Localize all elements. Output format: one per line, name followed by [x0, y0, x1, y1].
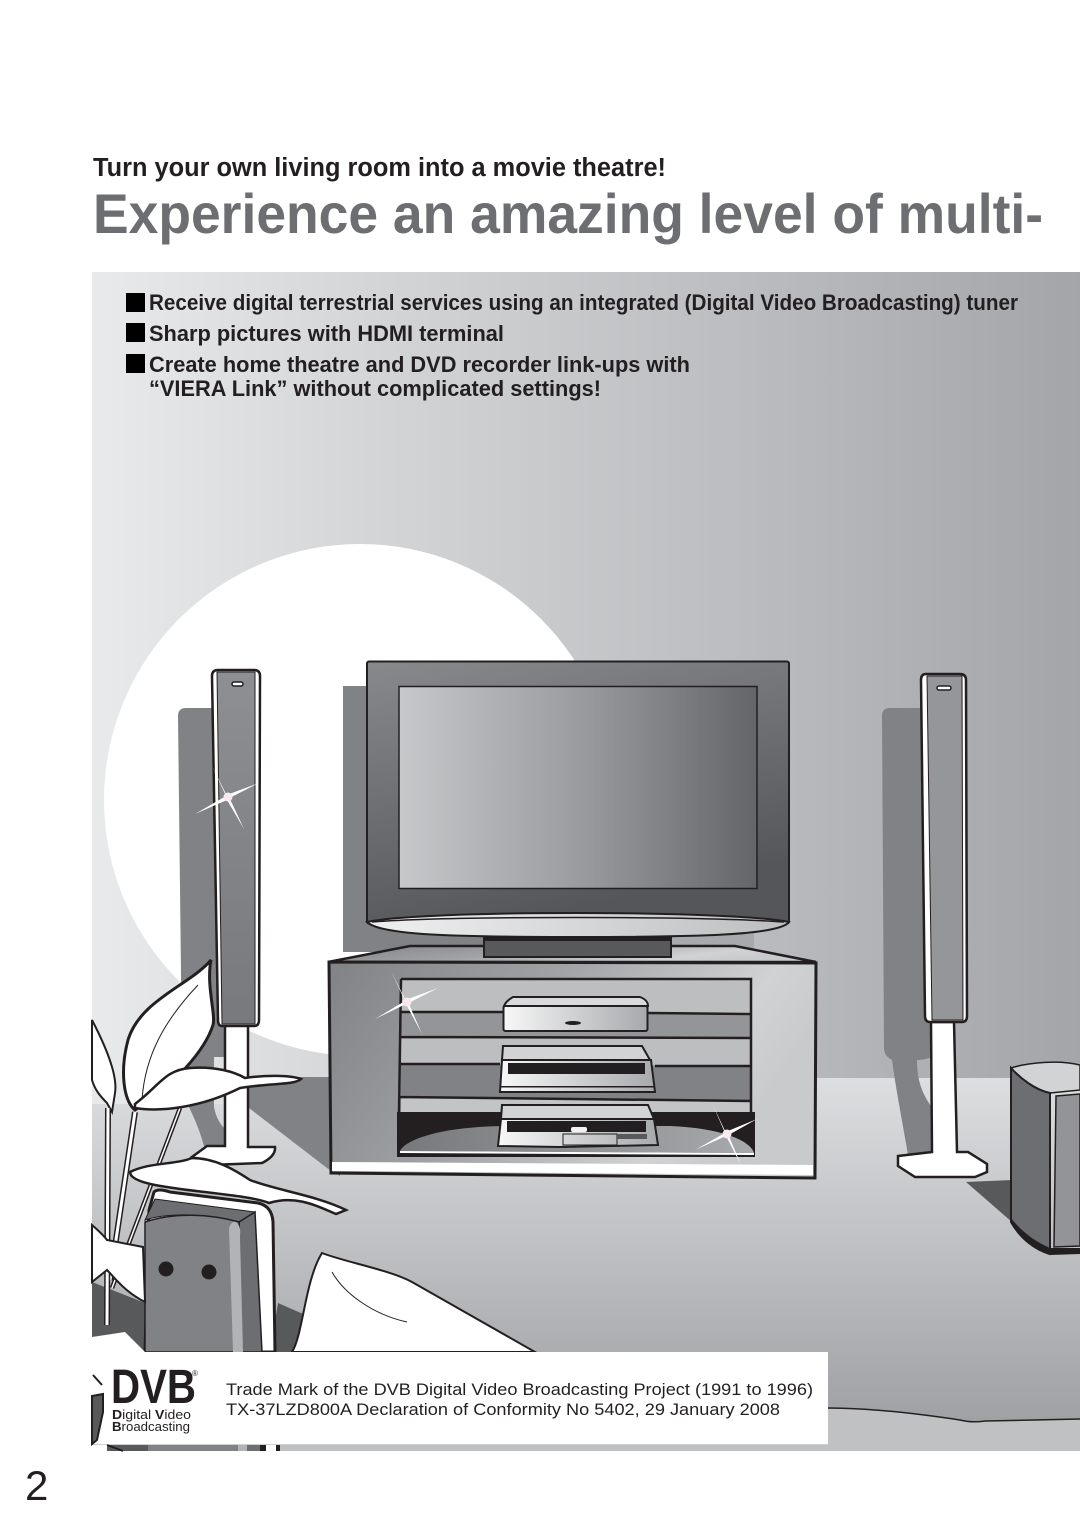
TV line [372, 918, 784, 922]
front speaker light strip [229, 1222, 243, 1352]
subwoofer base [1011, 1218, 1080, 1255]
subwoofer top [1011, 1062, 1080, 1093]
speaker body [212, 670, 260, 1026]
sparkle: left speaker [195, 766, 259, 829]
speaker pole [192, 1025, 275, 1165]
device: bottom [498, 1105, 658, 1147]
dark floor wedge left [92, 1282, 145, 1352]
floor band line [828, 1408, 1080, 1422]
white info box [92, 1352, 828, 1444]
cushion [292, 1253, 535, 1352]
stand front [329, 962, 816, 1178]
cushion fold [332, 1272, 407, 1322]
dark floor wedge right [270, 1303, 310, 1352]
bullet 1 text: Receive digital terrestrial services using an integrated (Digital Video Broadcasting) tuner [149, 290, 1018, 315]
speaker body [921, 674, 967, 1022]
TV shadow right part [672, 880, 754, 950]
bullet 3 text line 1: Create home theatre and DVD recorder link-ups with [149, 352, 690, 377]
panel: living room illustration [92, 272, 1080, 1451]
TV neck base [484, 938, 671, 957]
logo caption line 2: Broadcasting [112, 1419, 190, 1434]
black cavity [397, 1112, 755, 1157]
lower floor band [828, 1408, 1080, 1451]
floor [92, 1078, 1080, 1451]
TV bezel [367, 662, 789, 924]
trademark text line 1: Trade Mark of the DVB Digital Video Broadcasting Project (1991 to 1996) [226, 1380, 813, 1399]
plant stems [107, 1108, 180, 1325]
left speaker shadow [178, 708, 230, 1150]
stand neck over top [484, 940, 671, 957]
shelf back 2 [401, 1038, 751, 1066]
TV shadow [343, 686, 754, 952]
bullet 1 square [126, 293, 145, 312]
bottom strip [92, 1445, 828, 1451]
big leaf [124, 960, 214, 1110]
speaker badge [232, 682, 243, 686]
speaker pole [898, 1022, 987, 1177]
low leaf bottom [92, 1332, 145, 1352]
front speaker side [239, 1212, 262, 1352]
subwoofer front [1054, 1094, 1080, 1247]
glass shelf [400, 1126, 754, 1153]
shelf outline [399, 979, 751, 1112]
declaration text line 2: TX-37LZD800A Declaration of Conformity No 5402, 29 January 2008 [226, 1400, 780, 1419]
middle leaf [135, 1068, 301, 1109]
wall background [92, 272, 1080, 1451]
right speaker shadow [882, 708, 940, 1155]
TV [367, 662, 789, 957]
bullet list [126, 290, 1018, 401]
left speaker [192, 670, 275, 1165]
page number: 2 [25, 1462, 48, 1509]
DVB wordmark: DVB [111, 1361, 196, 1414]
sparkle: stand bottom [695, 1103, 757, 1165]
device: middle [500, 1046, 655, 1092]
front speaker top [145, 1199, 255, 1222]
shelf back 1 [401, 979, 751, 1012]
low leaf left [92, 1225, 145, 1302]
shelf back 3 [401, 1098, 751, 1112]
white plinth [332, 1162, 813, 1175]
subwoofer side [1011, 1068, 1050, 1254]
right speaker [898, 674, 987, 1177]
subwoofer shadow [966, 1180, 1012, 1222]
speaker panel [217, 672, 255, 1024]
shelf band 2 [401, 1064, 751, 1100]
white circle [104, 544, 616, 1056]
glass shelf front edge [400, 1152, 754, 1154]
sparkle: stand top [375, 971, 438, 1034]
speaker panel [927, 676, 963, 1020]
bullet 3 text line 2: “VIERA Link” without complicated settings! [149, 376, 601, 401]
device: top [504, 997, 648, 1031]
left leaf [92, 1020, 115, 1112]
leaf fragments by logo [92, 1375, 123, 1451]
TV screen [399, 686, 757, 888]
bullet 2 text: Sharp pictures with HDMI terminal [149, 321, 504, 346]
subtitle: Turn your own living room into a movie theatre! [93, 154, 666, 182]
logo caption line 1: Digital Video [112, 1407, 191, 1422]
front speaker hole right [202, 1264, 216, 1280]
stand top [328, 946, 816, 962]
DVB logo [111, 1361, 198, 1434]
front speaker hole left [158, 1262, 174, 1276]
bullet 3 square [126, 354, 145, 373]
front speaker outer frame [145, 1190, 275, 1352]
title: Experience an amazing level of multi- [93, 182, 1043, 245]
bullet 2 square [126, 323, 145, 342]
front speaker [145, 1190, 275, 1352]
stand shadow on floor [249, 1077, 340, 1176]
subwoofer [966, 1062, 1080, 1255]
speaker badge [937, 686, 951, 690]
TV oval foot [367, 913, 789, 937]
shelf band 1 [401, 1012, 751, 1037]
registered mark: ® [192, 1369, 198, 1378]
TV stand [328, 940, 816, 1178]
front speaker face [145, 1215, 241, 1352]
lower leaf [130, 1158, 346, 1214]
